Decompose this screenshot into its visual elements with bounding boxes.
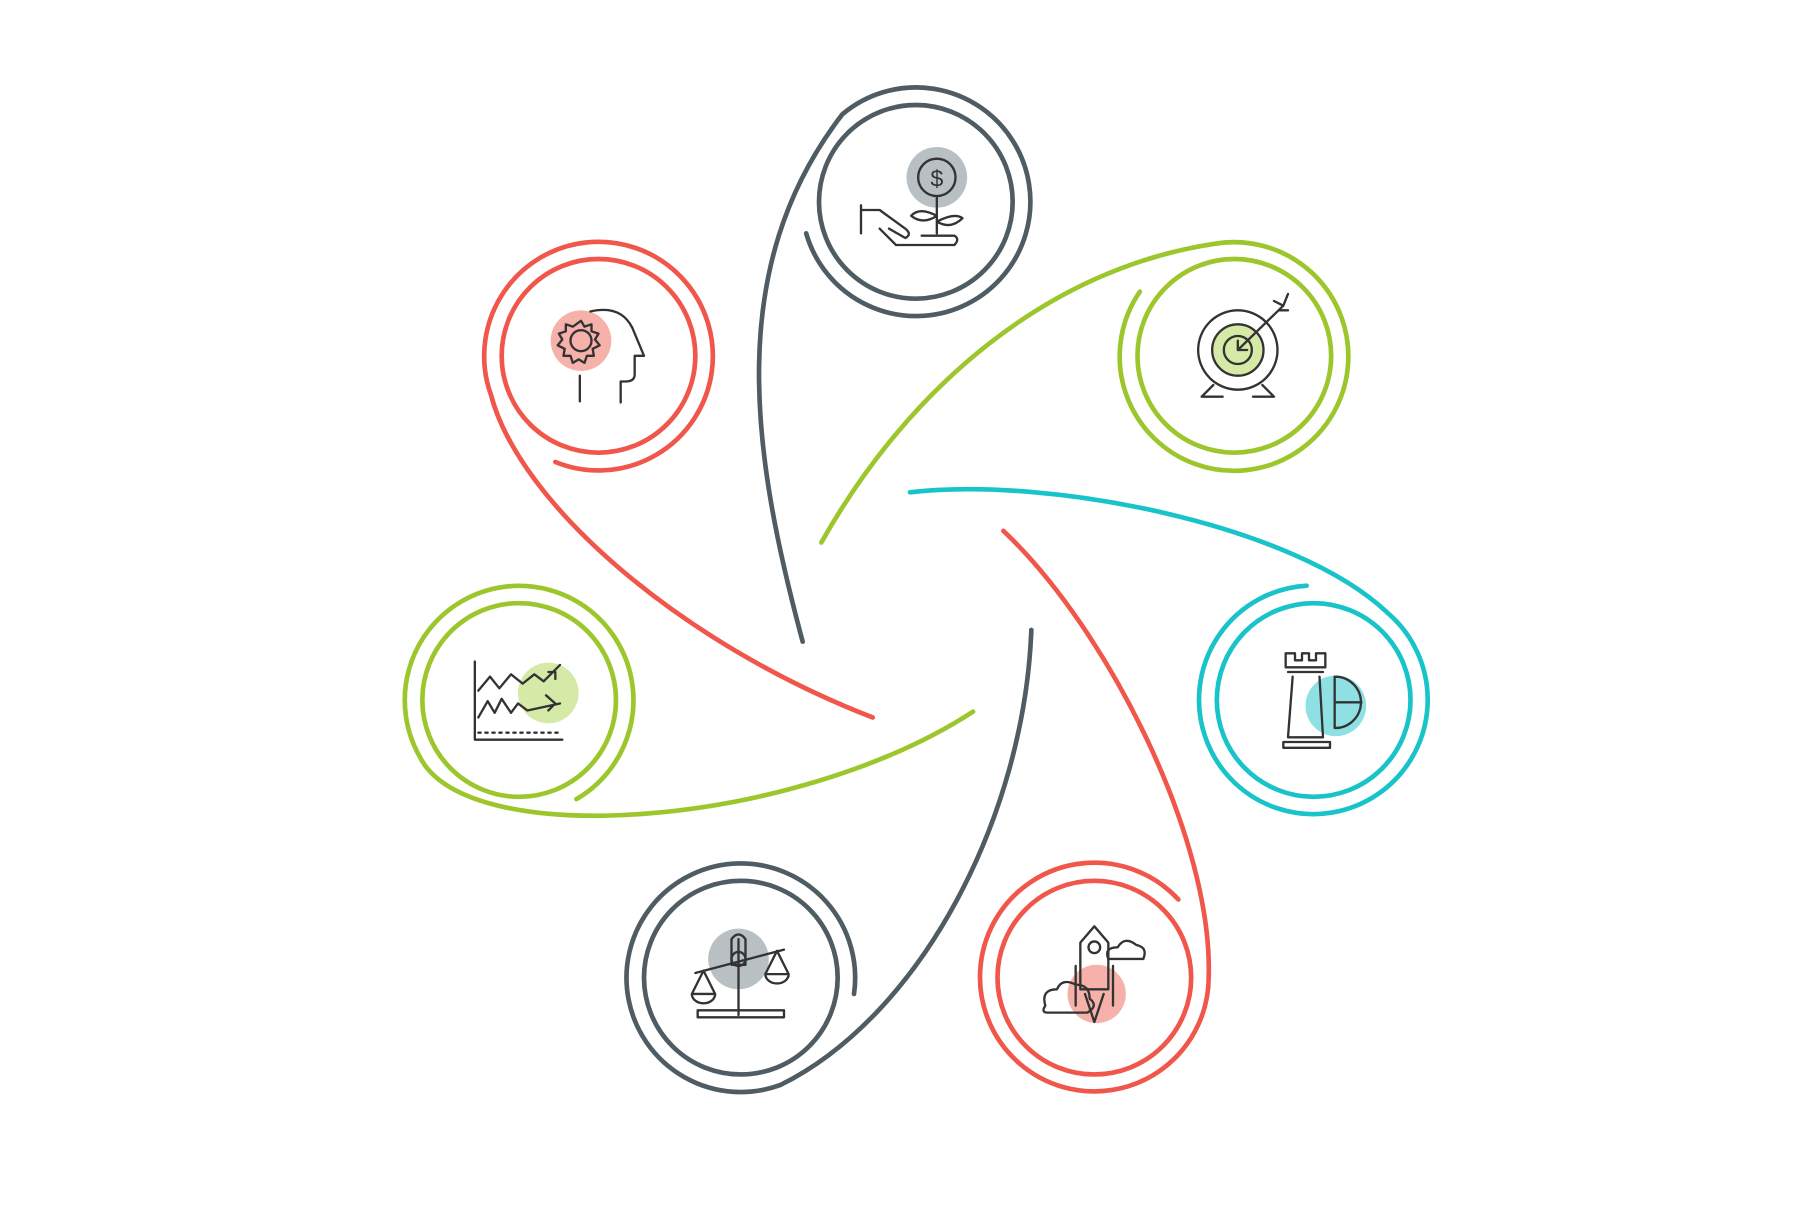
icon: head with gear — [551, 310, 644, 402]
icon: balance scale — [692, 929, 789, 1017]
icon: trend chart with arrows — [475, 661, 579, 740]
loop: upper-left red — [484, 242, 873, 717]
icon: hand with money plant — [861, 147, 967, 245]
icon: rocket with clouds — [1043, 926, 1145, 1023]
icon: hand with money plant: $ — [930, 166, 943, 192]
loop: lower-left dark gray — [626, 630, 1031, 1092]
icon: rook chess piece with pie chart — [1283, 653, 1366, 748]
icon: target with arrow — [1198, 294, 1288, 397]
loop: right cyan — [910, 489, 1428, 814]
loop: upper-right green — [821, 242, 1348, 542]
loop: lower-right red — [980, 531, 1209, 1091]
loop: left green — [405, 586, 973, 816]
loop: top dark gray — [759, 87, 1030, 642]
